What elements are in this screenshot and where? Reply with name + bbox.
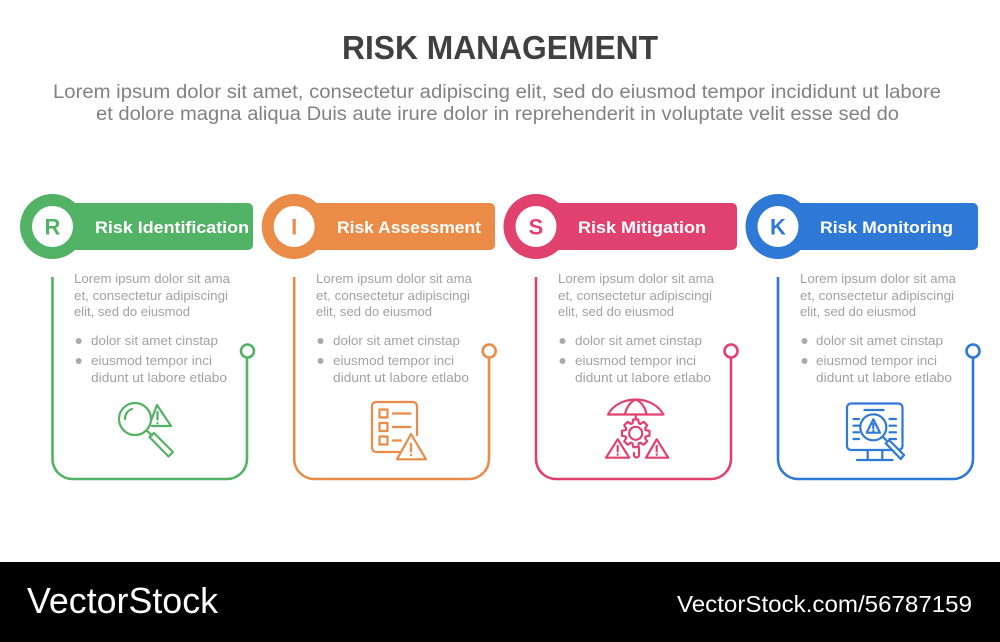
bullet list: eiusmod tempor inci [333, 353, 454, 368]
frame line with end ring [536, 277, 738, 479]
subtitle [53, 82, 941, 125]
header: risk assessment: Risk Assessment [337, 218, 481, 237]
bullet list [802, 333, 952, 385]
description text: elit, sed do eiusmod [316, 304, 432, 319]
bullet list: dolor sit amet cinstap [575, 333, 702, 348]
frame line with end ring [778, 277, 980, 479]
bullet list: dolor sit amet cinstap [333, 333, 460, 348]
header: risk mitigation [504, 194, 737, 259]
footer image reference: VectorStock.com/56787159 [677, 591, 972, 617]
description text: Lorem ipsum dolor sit ama [316, 271, 473, 286]
frame line with end ring [52, 277, 254, 479]
frame line with end ring [294, 277, 496, 479]
description text: elit, sed do eiusmod [558, 304, 674, 319]
description text: et, consectetur adipiscingi [74, 288, 228, 303]
footer brand: VectorStock [27, 580, 219, 621]
bullet list: didunt ut labore etlabo [816, 370, 952, 385]
bullet list [560, 333, 711, 385]
panel: risk assessment [262, 194, 496, 479]
description text [800, 271, 957, 319]
description text: elit, sed do eiusmod [800, 304, 916, 319]
bullet list [76, 333, 227, 385]
subtitle: Lorem ipsum dolor sit amet, consectetur adipiscing elit, sed do eiusmod tempor incididunt ut labore [53, 82, 941, 103]
panel: risk monitoring [746, 194, 980, 479]
panel: risk identification [20, 194, 254, 479]
header: risk monitoring [746, 194, 978, 259]
bullet list: didunt ut labore etlabo [91, 370, 227, 385]
bullet list: eiusmod tempor inci [575, 353, 696, 368]
description text: elit, sed do eiusmod [74, 304, 190, 319]
bullet list: dolor sit amet cinstap [816, 333, 943, 348]
bullet list: didunt ut labore etlabo [575, 370, 711, 385]
header: risk monitoring: K [770, 214, 786, 240]
title: RISK MANAGEMENT [342, 29, 658, 66]
description text: Lorem ipsum dolor sit ama [558, 271, 715, 286]
bullet list: eiusmod tempor inci [816, 353, 937, 368]
description text: et, consectetur adipiscingi [558, 288, 712, 303]
header: risk assessment [262, 194, 495, 259]
bullet list [318, 333, 469, 385]
header: risk identification: Risk Identification [95, 218, 249, 237]
description text: et, consectetur adipiscingi [316, 288, 470, 303]
icon: umbrella, gear and warnings [606, 400, 668, 458]
bullet list: eiusmod tempor inci [91, 353, 212, 368]
icon: checklist with warning [372, 402, 426, 459]
icon: magnifier with warning [119, 403, 173, 456]
header: risk monitoring: Risk Monitoring [820, 218, 953, 237]
description text: Lorem ipsum dolor sit ama [74, 271, 231, 286]
header: risk identification: R [45, 214, 61, 240]
bullet list: dolor sit amet cinstap [91, 333, 218, 348]
header: risk assessment: I [291, 214, 297, 240]
description text [558, 271, 715, 319]
bullet list: didunt ut labore etlabo [333, 370, 469, 385]
icon: monitor with magnifier and warning [847, 404, 904, 460]
description text [316, 271, 473, 319]
subtitle: et dolore magna aliqua Duis aute irure dolor in reprehenderit in voluptate velit esse sed do [96, 104, 899, 125]
panel: risk mitigation [504, 194, 738, 479]
description text: et, consectetur adipiscingi [800, 288, 954, 303]
header: risk mitigation: S [529, 214, 543, 240]
header: risk mitigation: Risk Mitigation [578, 218, 706, 237]
description text: Lorem ipsum dolor sit ama [800, 271, 957, 286]
header: risk identification [20, 194, 253, 259]
footer bar [0, 562, 1000, 642]
description text [74, 271, 231, 319]
